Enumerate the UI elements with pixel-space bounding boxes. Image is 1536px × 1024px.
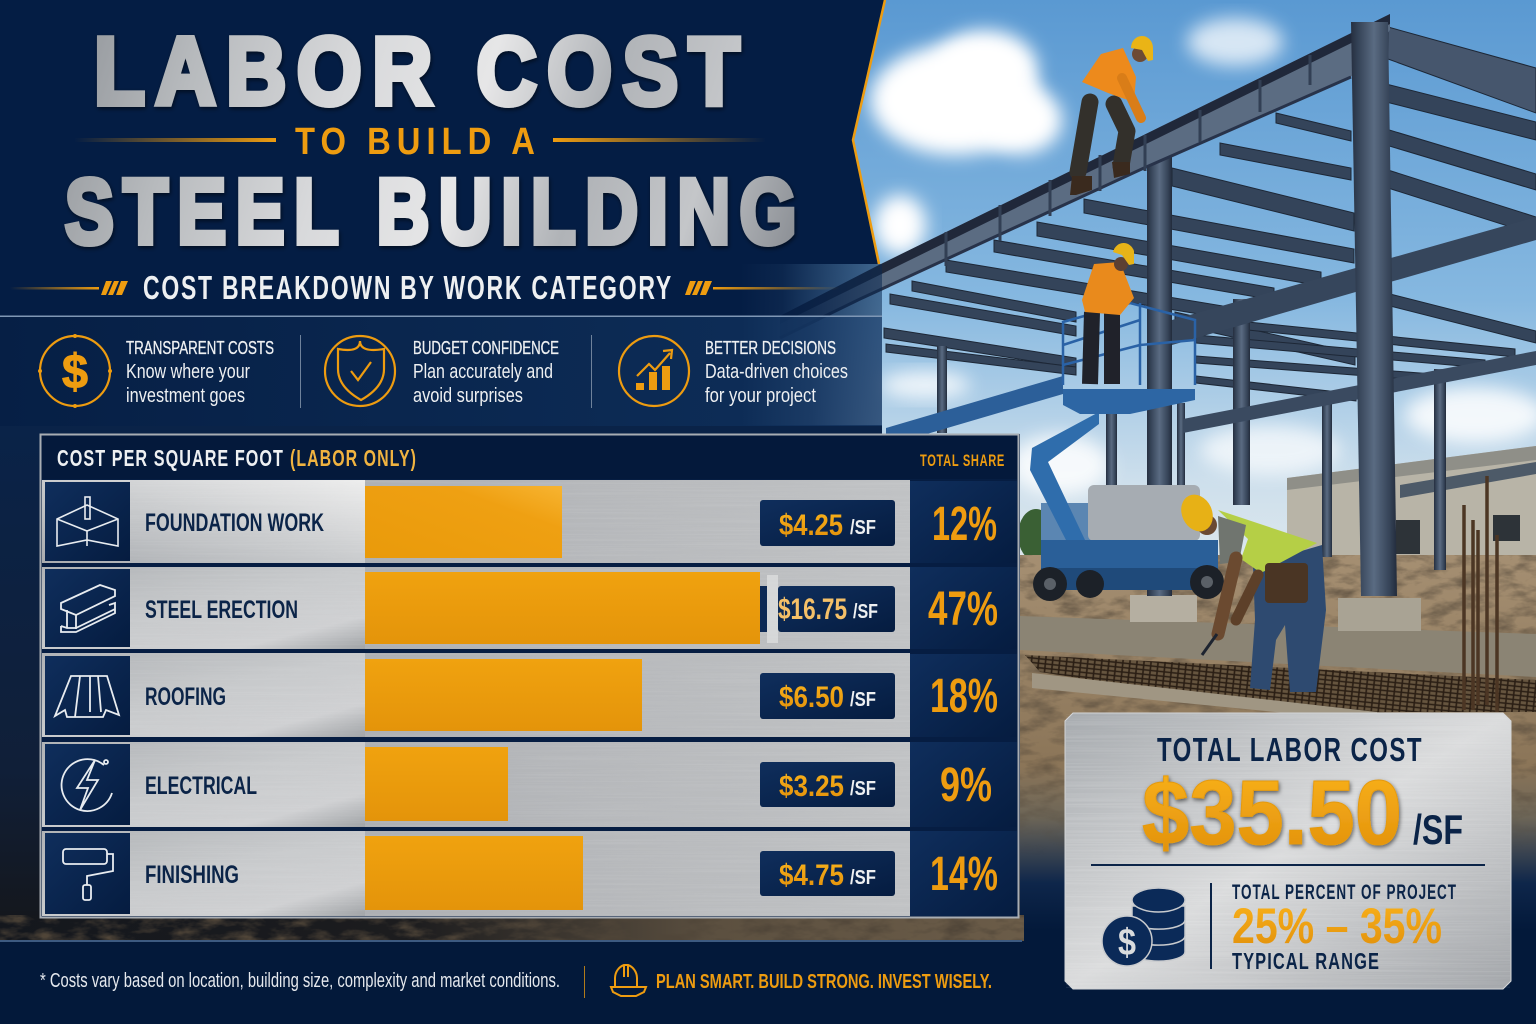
benefit: budget confidence: BUDGET CONFIDENCE	[413, 338, 559, 358]
benefit: budget confidence	[325, 336, 559, 407]
ground	[1020, 555, 1536, 1024]
secondary columns	[937, 299, 1446, 570]
row: steel erection: /SF	[853, 601, 878, 623]
benefits strip	[0, 316, 882, 426]
icon: dollar circle	[38, 334, 112, 408]
column A	[1147, 155, 1172, 596]
row: finishing: /SF	[850, 867, 876, 889]
trees	[1018, 509, 1054, 561]
benefit: better decisions	[619, 336, 848, 407]
row: finishing	[42, 831, 1017, 916]
row: foundation work: FOUNDATION WORK	[145, 509, 324, 537]
row: foundation work: /SF	[850, 517, 876, 539]
unit: /SF	[1413, 806, 1463, 853]
total labor cost panel: 25% – 35%	[1232, 898, 1442, 954]
foundation walls and rebar	[1020, 476, 1536, 722]
cost table panel	[40, 434, 1018, 918]
table header: TOTAL SHARE	[920, 451, 1005, 470]
benefit: better decisions: for your project	[705, 385, 816, 407]
row: steel erection	[42, 567, 1017, 649]
icon: lightning bolt circle	[62, 759, 112, 811]
benefit: transparent costs	[38, 334, 274, 408]
row: electrical	[42, 742, 1017, 827]
icon: roof panel	[55, 676, 119, 717]
main rafter	[780, 14, 1390, 338]
icon: growth chart	[619, 336, 689, 406]
row: roofing: ROOFING	[145, 683, 226, 711]
worker on lift	[1082, 243, 1134, 384]
row: roofing	[42, 653, 1017, 737]
row: electrical: /SF	[850, 778, 876, 800]
title line 2 with rules	[74, 121, 766, 163]
worker bending over	[1175, 489, 1326, 692]
footer	[0, 940, 1022, 998]
row: electrical: ELECTRICAL	[145, 772, 257, 800]
table header: (LABOR ONLY)	[290, 445, 417, 471]
icon: coin stack: $	[1118, 922, 1136, 964]
tagline: PLAN SMART. BUILD STRONG. INVEST WISELY.	[656, 971, 992, 993]
subtitle: COST BREAKDOWN BY WORK CATEGORY	[143, 269, 673, 306]
row: steel erection: $16.75	[778, 593, 847, 626]
row: electrical: 9%	[940, 759, 992, 812]
row: finishing: 14%	[930, 848, 998, 901]
row: roofing: 18%	[930, 670, 998, 723]
benefit: transparent costs: TRANSPARENT COSTS	[126, 338, 274, 358]
title	[65, 18, 806, 263]
table header: COST PER SQUARE FOOT	[57, 445, 284, 471]
total labor cost panel: TYPICAL RANGE	[1232, 948, 1380, 974]
construction photo scene	[774, 0, 1536, 906]
warehouse building	[1287, 446, 1536, 565]
purlins and steel frame	[780, 14, 1536, 596]
row: foundation work: $4.25	[779, 509, 843, 542]
footnote: * Costs vary based on location, building size, complexity and market conditions.	[40, 970, 560, 992]
icon: dollar circle: $	[62, 346, 88, 399]
benefit: budget confidence: Plan accurately and	[413, 361, 553, 383]
title line 3: STEEL BUILDING	[65, 161, 806, 263]
row: finishing: FINISHING	[145, 861, 239, 889]
icon: foundation	[57, 497, 118, 546]
icon: i-beam	[61, 585, 115, 632]
panel fade over photo	[740, 264, 882, 316]
heading: TOTAL LABOR COST	[1157, 731, 1423, 768]
worker on beam	[1070, 36, 1153, 195]
amount: $35.50	[1142, 762, 1402, 864]
row: steel erection: 47%	[928, 583, 998, 636]
row: roofing: $6.50	[779, 681, 844, 714]
boom lift	[886, 303, 1224, 601]
footer bar	[0, 941, 1040, 1024]
row: foundation work: 12%	[932, 498, 997, 551]
table header	[42, 436, 1017, 479]
title line 1: LABOR COST	[94, 18, 750, 125]
rafters	[1172, 217, 1536, 345]
icon: hard hat	[611, 965, 646, 996]
orange chevron border	[853, 0, 885, 264]
row: roofing: /SF	[850, 689, 876, 711]
icon: paint roller	[63, 849, 113, 900]
sky	[740, 0, 1536, 600]
lower left dark site background	[0, 425, 1024, 942]
icon: shield	[325, 336, 395, 406]
row: foundation work	[42, 480, 1017, 563]
icon: coin stack	[1102, 888, 1185, 966]
left navy header panel	[0, 0, 885, 430]
title line 2 with rules: TO BUILD A	[295, 121, 541, 163]
benefit: transparent costs: investment goes	[126, 385, 245, 407]
row: electrical: $3.25	[779, 770, 844, 803]
column B	[1351, 22, 1397, 596]
row: steel erection: STEEL ERECTION	[145, 596, 298, 624]
total labor cost panel	[1065, 713, 1511, 989]
clouds	[870, 18, 1536, 495]
row: finishing: $4.75	[779, 859, 844, 892]
benefit: transparent costs: Know where your	[126, 361, 250, 383]
benefit: better decisions: BETTER DECISIONS	[705, 338, 836, 358]
benefit: better decisions: Data-driven choices	[705, 361, 848, 383]
benefit: budget confidence: avoid surprises	[413, 385, 523, 407]
